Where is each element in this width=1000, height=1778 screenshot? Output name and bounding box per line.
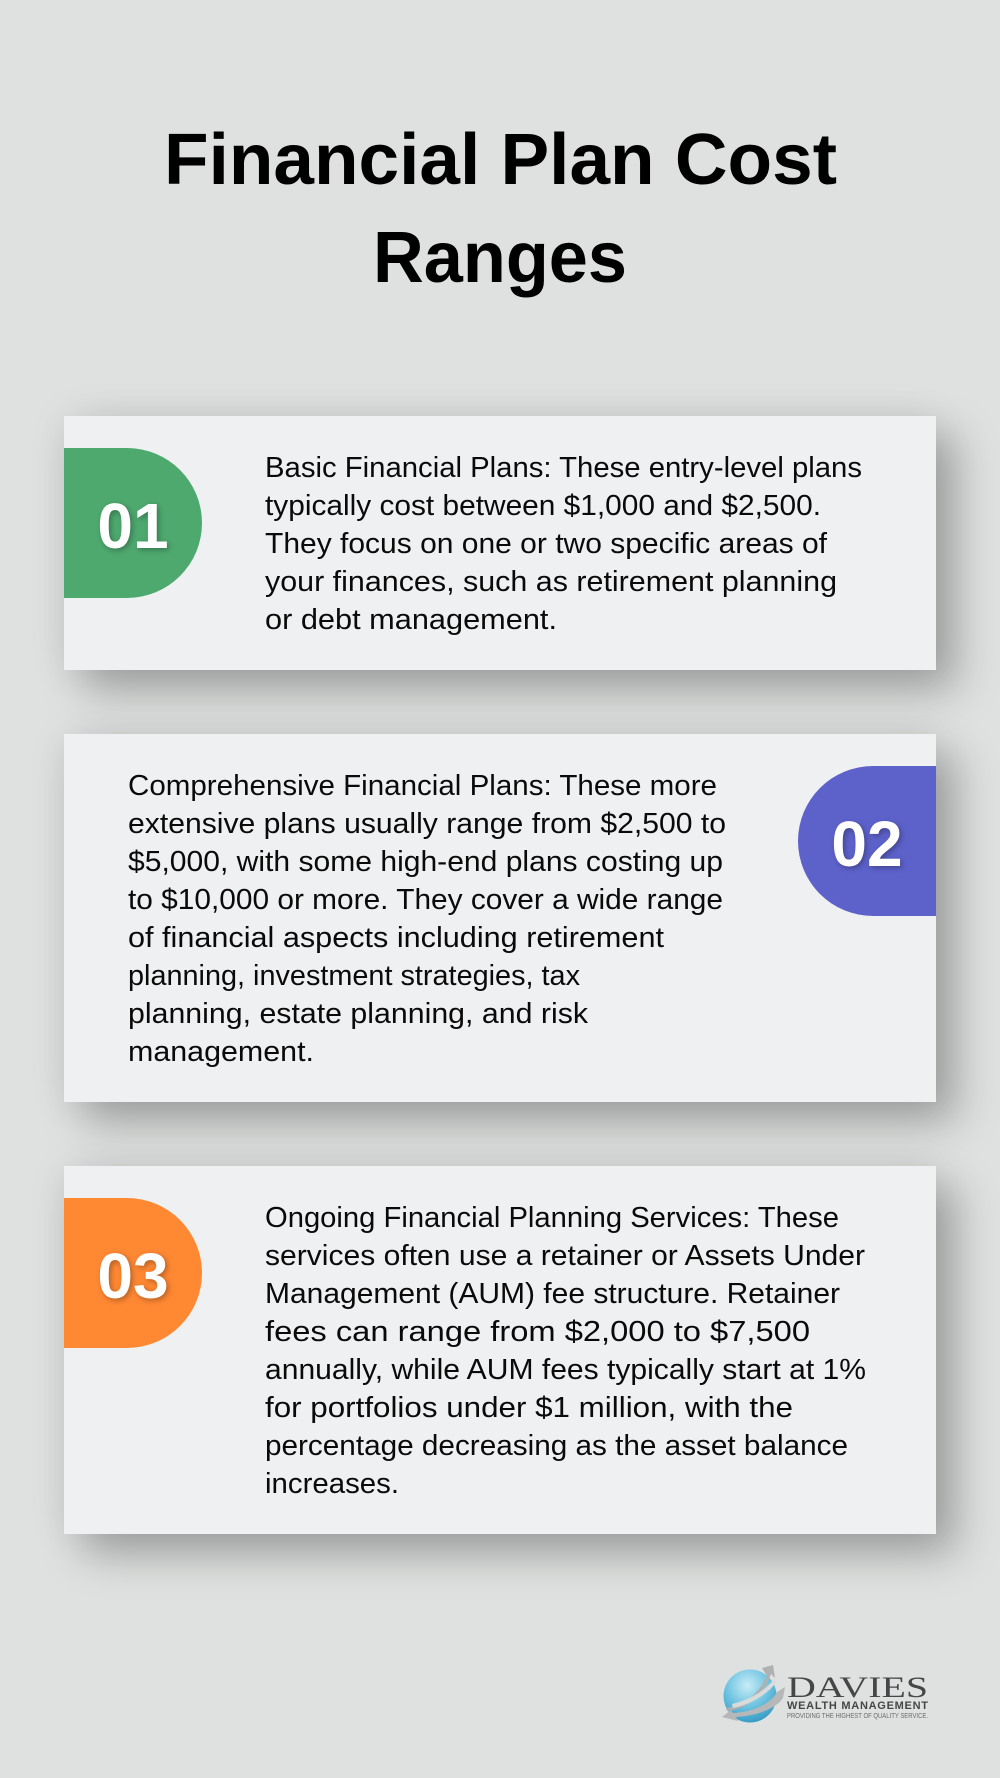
badge: 03: 03 [97,1240,169,1312]
text: basic plans description [265,452,862,636]
panel: basic financial plans [64,416,936,670]
badge: 03 [64,1198,202,1348]
logo wordmark: PROVIDING THE HIGHEST OF QUALITY SERVICE. [787,1713,928,1720]
text: ongoing services description: fees can range from $2,000 to $7,500 [265,1316,810,1348]
badge: 01: 01 [97,490,169,562]
icon: globe with arrows [722,1665,785,1722]
text: ongoing services description: percentage decreasing as the asset balance [265,1430,848,1462]
title: Ranges [373,218,627,298]
text: comprehensive plans description [128,770,726,1068]
text: ongoing services description: Management (AUM) fee structure. Retainer [265,1278,840,1310]
badge: 02 [798,766,936,916]
title: Financial Plan Cost [164,120,837,200]
text: comprehensive plans description: management. [128,1036,314,1068]
text: basic plans description: They focus on one or two specific areas of [265,528,828,560]
text: basic plans description: Basic Financial Plans: These entry-level plans [265,452,862,484]
text: comprehensive plans description: to $10,000 or more. They cover a wide range [128,884,723,916]
text: ongoing services description: annually, while AUM fees typically start at 1% [265,1354,866,1386]
text: comprehensive plans description: planning, estate planning, and risk [128,998,589,1030]
panel: comprehensive financial plans [64,734,936,1102]
text: comprehensive plans description: $5,000, with some high-end plans costing up [128,846,723,878]
text: basic plans description: or debt management. [265,604,557,636]
text: comprehensive plans description: planning, investment strategies, tax [128,960,580,992]
logo: Davies Wealth Management [722,1665,928,1722]
text: ongoing services description [265,1202,866,1500]
badge: 01 [64,448,202,598]
text: basic plans description: typically cost between $1,000 and $2,500. [265,490,821,522]
logo wordmark: WEALTH MANAGEMENT [787,1700,928,1712]
badge: 02: 02 [831,808,903,880]
text: comprehensive plans description: Comprehensive Financial Plans: These more [128,770,717,802]
title [164,120,837,298]
text: basic plans description: your finances, such as retirement planning [265,566,837,598]
logo wordmark [787,1671,928,1720]
text: comprehensive plans description: extensive plans usually range from $2,500 to [128,808,726,840]
panel: ongoing financial planning services [64,1166,936,1534]
logo wordmark: DAVIES [787,1671,928,1704]
text: comprehensive plans description: of financial aspects including retirement [128,922,664,954]
text: ongoing services description: services often use a retainer or Assets Under [265,1240,865,1272]
text: ongoing services description: increases. [265,1468,399,1500]
text: ongoing services description: for portfolios under $1 million, with the [265,1392,793,1424]
text: ongoing services description: Ongoing Financial Planning Services: These [265,1202,839,1234]
